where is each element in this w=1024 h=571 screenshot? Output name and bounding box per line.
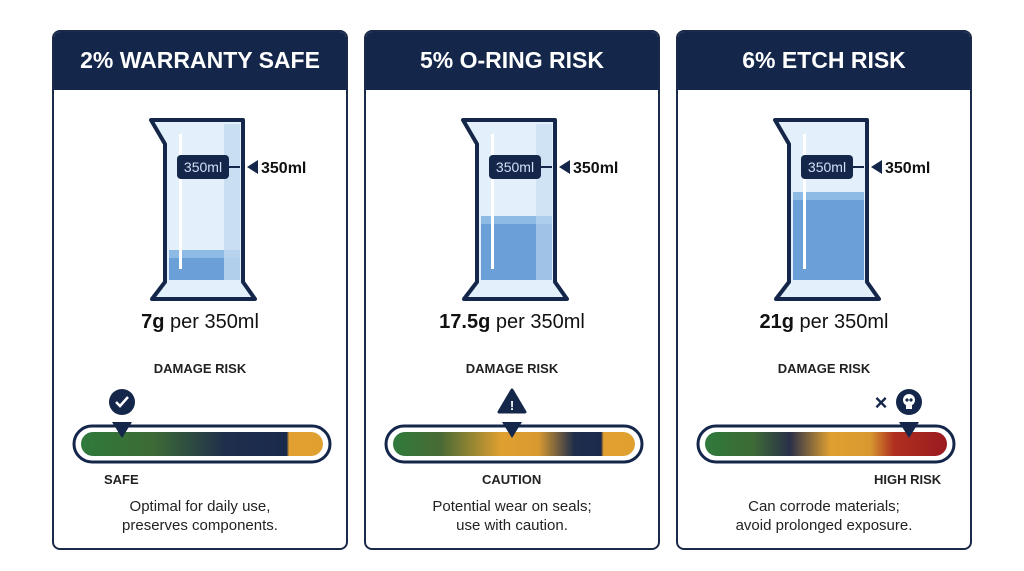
description xyxy=(122,498,278,534)
description: Optimal for daily use, xyxy=(130,498,270,515)
panel: 6% etch risk xyxy=(676,30,972,550)
heading: 2% WARRANTY SAFE xyxy=(80,47,320,73)
heading: 6% ETCH RISK xyxy=(742,47,906,73)
heading xyxy=(54,32,346,90)
heading xyxy=(678,32,970,90)
icon: cylinder 5%: 350ml xyxy=(573,160,618,177)
icon: cylinder 2%: 350ml xyxy=(261,160,306,177)
icon: cylinder 6% xyxy=(772,118,930,301)
icon: cylinder 2% xyxy=(148,118,306,301)
description: avoid prolonged exposure. xyxy=(736,517,912,534)
description: preserves components. xyxy=(122,517,278,534)
risk bar: × xyxy=(875,390,887,415)
icon: cylinder 5% xyxy=(460,118,618,301)
description xyxy=(432,498,592,534)
description xyxy=(736,498,912,534)
text: amount: 7g per 350ml xyxy=(141,311,259,333)
text: damage risk: DAMAGE RISK xyxy=(466,361,558,376)
text: damage risk: DAMAGE RISK xyxy=(778,361,870,376)
label: high risk: HIGH RISK xyxy=(874,472,941,487)
icon: cylinder 2%: 350ml xyxy=(184,159,222,175)
risk bar xyxy=(72,389,332,464)
label: caution: CAUTION xyxy=(482,472,541,487)
risk bar xyxy=(696,389,956,464)
text: amount: 17.5g per 350ml xyxy=(439,311,585,333)
text: amount: 21g per 350ml xyxy=(760,311,888,333)
icon: cylinder 6%: 350ml xyxy=(808,159,846,175)
risk bar xyxy=(384,388,644,464)
description: use with caution. xyxy=(456,517,568,534)
heading xyxy=(366,32,658,90)
label: safe: SAFE xyxy=(104,472,139,487)
text: damage risk: DAMAGE RISK xyxy=(154,361,246,376)
panel: 5% o-ring risk xyxy=(364,30,660,550)
icon: cylinder 5%: 350ml xyxy=(496,159,534,175)
panel: 2% warranty safe xyxy=(52,30,348,550)
risk bar: ! xyxy=(510,398,514,413)
icon: cylinder 6%: 350ml xyxy=(885,160,930,177)
description: Potential wear on seals; xyxy=(432,498,592,515)
description: Can corrode materials; xyxy=(748,498,900,515)
heading: 5% O-RING RISK xyxy=(420,47,604,73)
